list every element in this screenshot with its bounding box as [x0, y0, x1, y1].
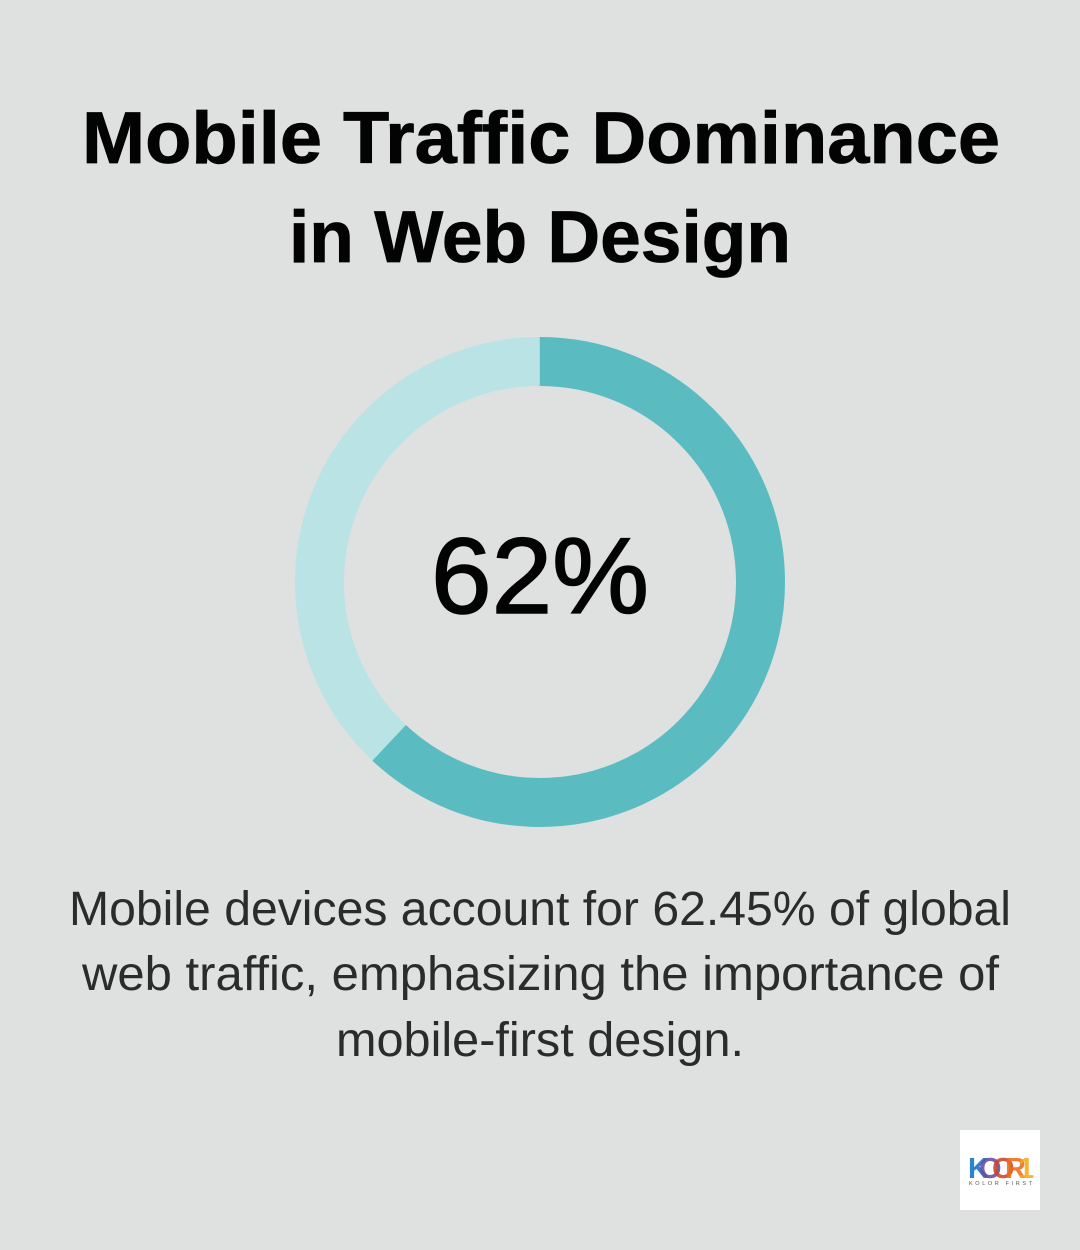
logo wordmark: R [1005, 1153, 1026, 1185]
title: Mobile Traffic Dominance [82, 98, 1000, 179]
center value: 62% [431, 515, 649, 636]
logo wordmark: O [992, 1153, 1015, 1185]
logo wordmark: O [979, 1153, 1002, 1185]
description text: web traffic, emphasizing the importance of [81, 948, 1000, 1001]
title [82, 98, 1000, 278]
description text: mobile-first design. [336, 1014, 744, 1067]
logo tagline: KOLOR FIRST [969, 1181, 1033, 1187]
donut chart: 62% [320, 362, 760, 802]
description text [69, 883, 1011, 1067]
logo badge [960, 1130, 1040, 1210]
logo wordmark: 1 [1018, 1153, 1034, 1185]
title: in Web Design [289, 197, 791, 278]
description text: Mobile devices account for 62.45% of global [69, 883, 1011, 936]
logo wordmark: K [968, 1153, 989, 1185]
